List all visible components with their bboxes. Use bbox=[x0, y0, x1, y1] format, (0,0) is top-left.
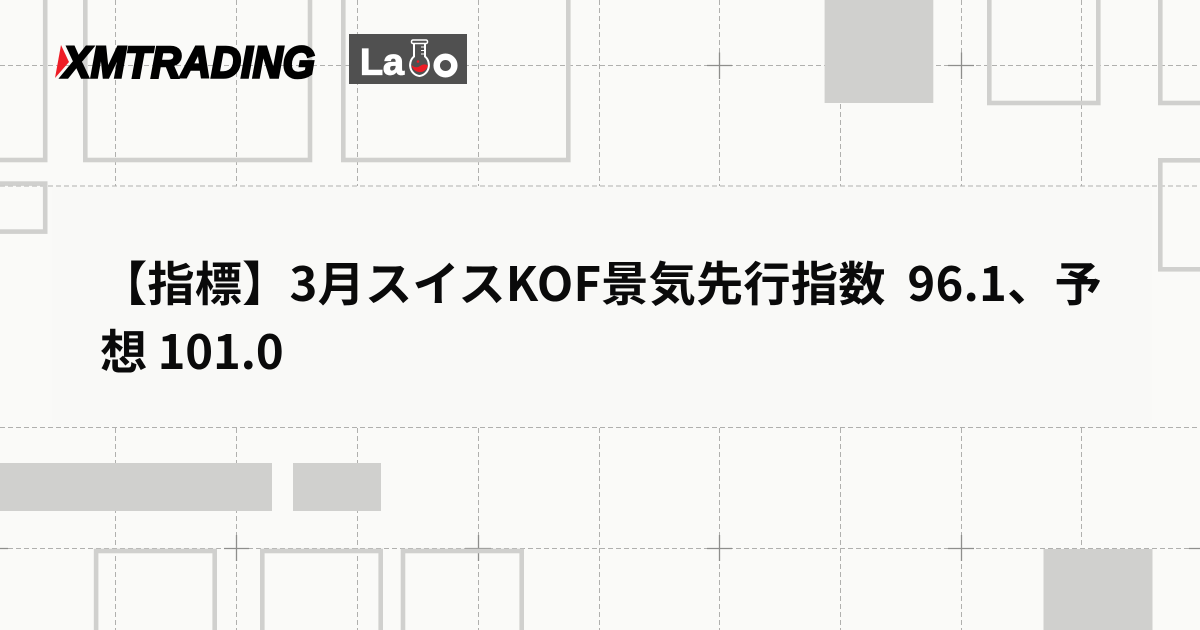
title: 想 101.0 bbox=[100, 314, 284, 383]
outlined boxes bottom bbox=[96, 551, 522, 630]
logo letters La: La bbox=[360, 42, 404, 82]
icon: flask bbox=[410, 40, 429, 76]
logo: Lab bbox=[349, 34, 467, 84]
logo letter o bbox=[437, 57, 454, 74]
outlined boxes top bbox=[0, 0, 1200, 269]
title panel bbox=[52, 187, 1152, 427]
title: 【指標】3月スイスKOF景気先行指数 96.1、予 bbox=[100, 246, 1102, 315]
title bbox=[100, 246, 1102, 383]
logo mark: red arrow bbox=[55, 45, 69, 78]
logo: XMTRADING bbox=[55, 38, 316, 86]
